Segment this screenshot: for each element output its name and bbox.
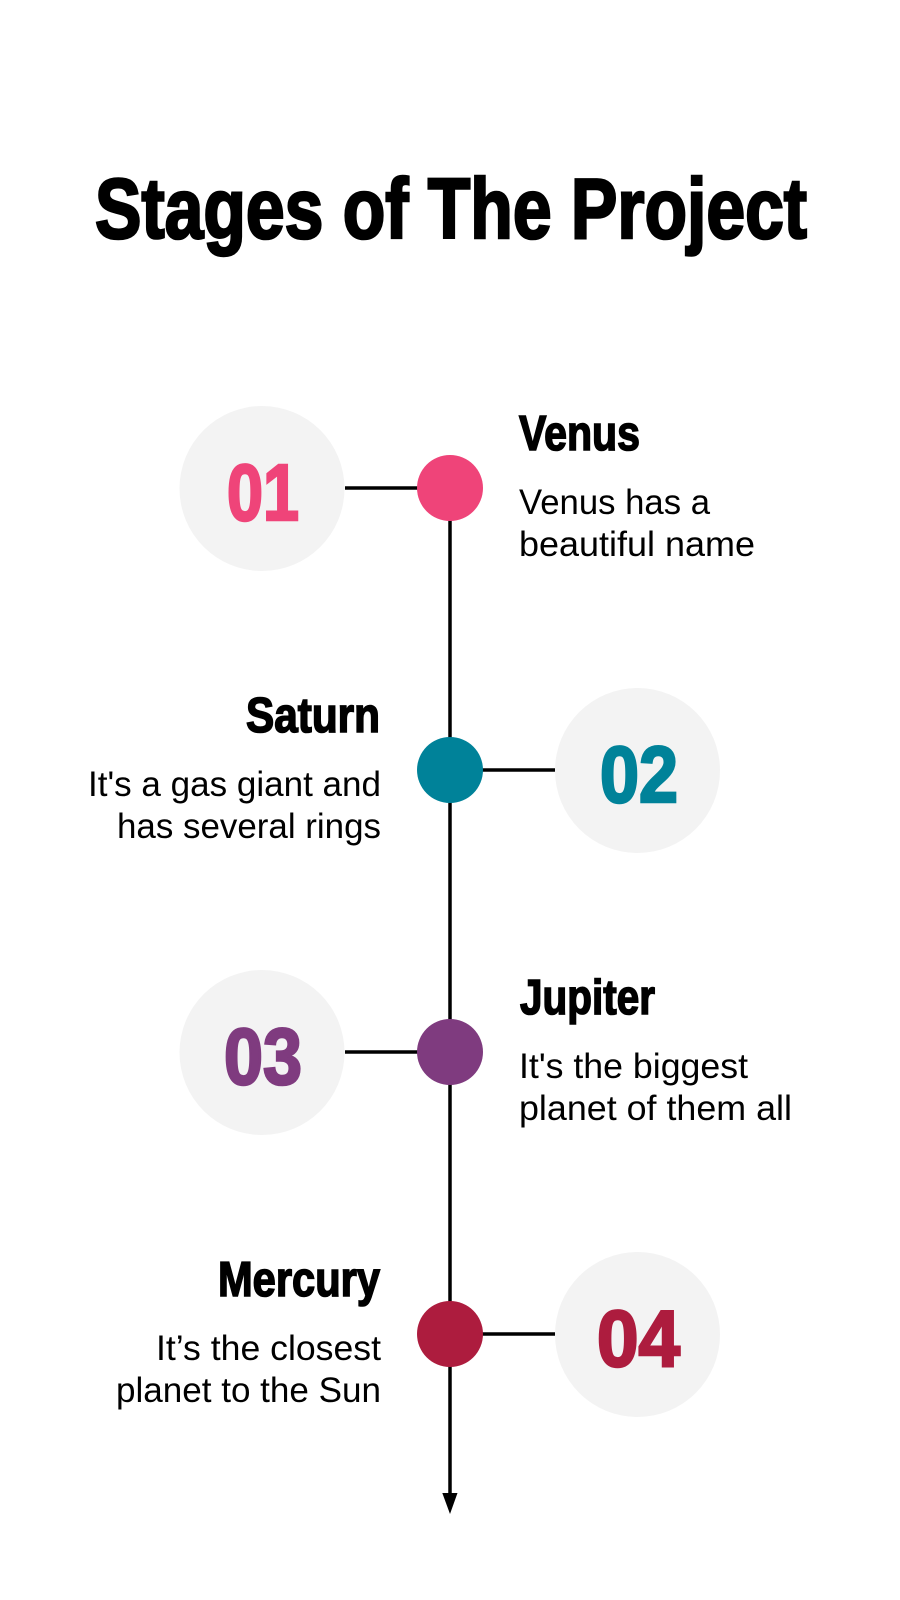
heading Mercury: Mercury [218,1253,380,1307]
node 1 [417,455,483,521]
description Mercury: It’s the closest [156,1329,381,1368]
description Jupiter: It's the biggest [519,1047,748,1086]
heading Jupiter: Jupiter [520,971,655,1025]
description Saturn: has several rings [117,807,381,846]
number badge 04 [555,1252,720,1417]
timeline arrow [442,488,458,1514]
node 2 [417,737,483,803]
stage 3: Jupiter [180,970,792,1135]
number badge 01 [180,406,344,571]
node 3 [417,1019,483,1085]
heading Venus: Venus [519,407,640,461]
number badge 04: 04 [597,1294,680,1383]
description Jupiter: planet of them all [519,1089,792,1128]
number badge 03 [180,970,344,1135]
description Venus [519,483,755,564]
stage 1: Venus [180,406,755,571]
description Venus: Venus has a [519,483,711,522]
description Mercury [116,1329,381,1410]
description Saturn [88,765,381,846]
node 4 [417,1301,483,1367]
description Jupiter [519,1047,792,1128]
description Saturn: It's a gas giant and [88,765,381,804]
heading Saturn: Saturn [246,689,380,743]
stage 4: Mercury [116,1252,720,1417]
stage 2: Saturn [88,688,720,853]
number badge 02: 02 [600,730,678,819]
description Venus: beautiful name [519,525,755,564]
number badge 01: 01 [227,448,299,537]
number badge 02 [555,688,720,853]
number badge 03: 03 [224,1012,302,1101]
description Mercury: planet to the Sun [116,1371,381,1410]
